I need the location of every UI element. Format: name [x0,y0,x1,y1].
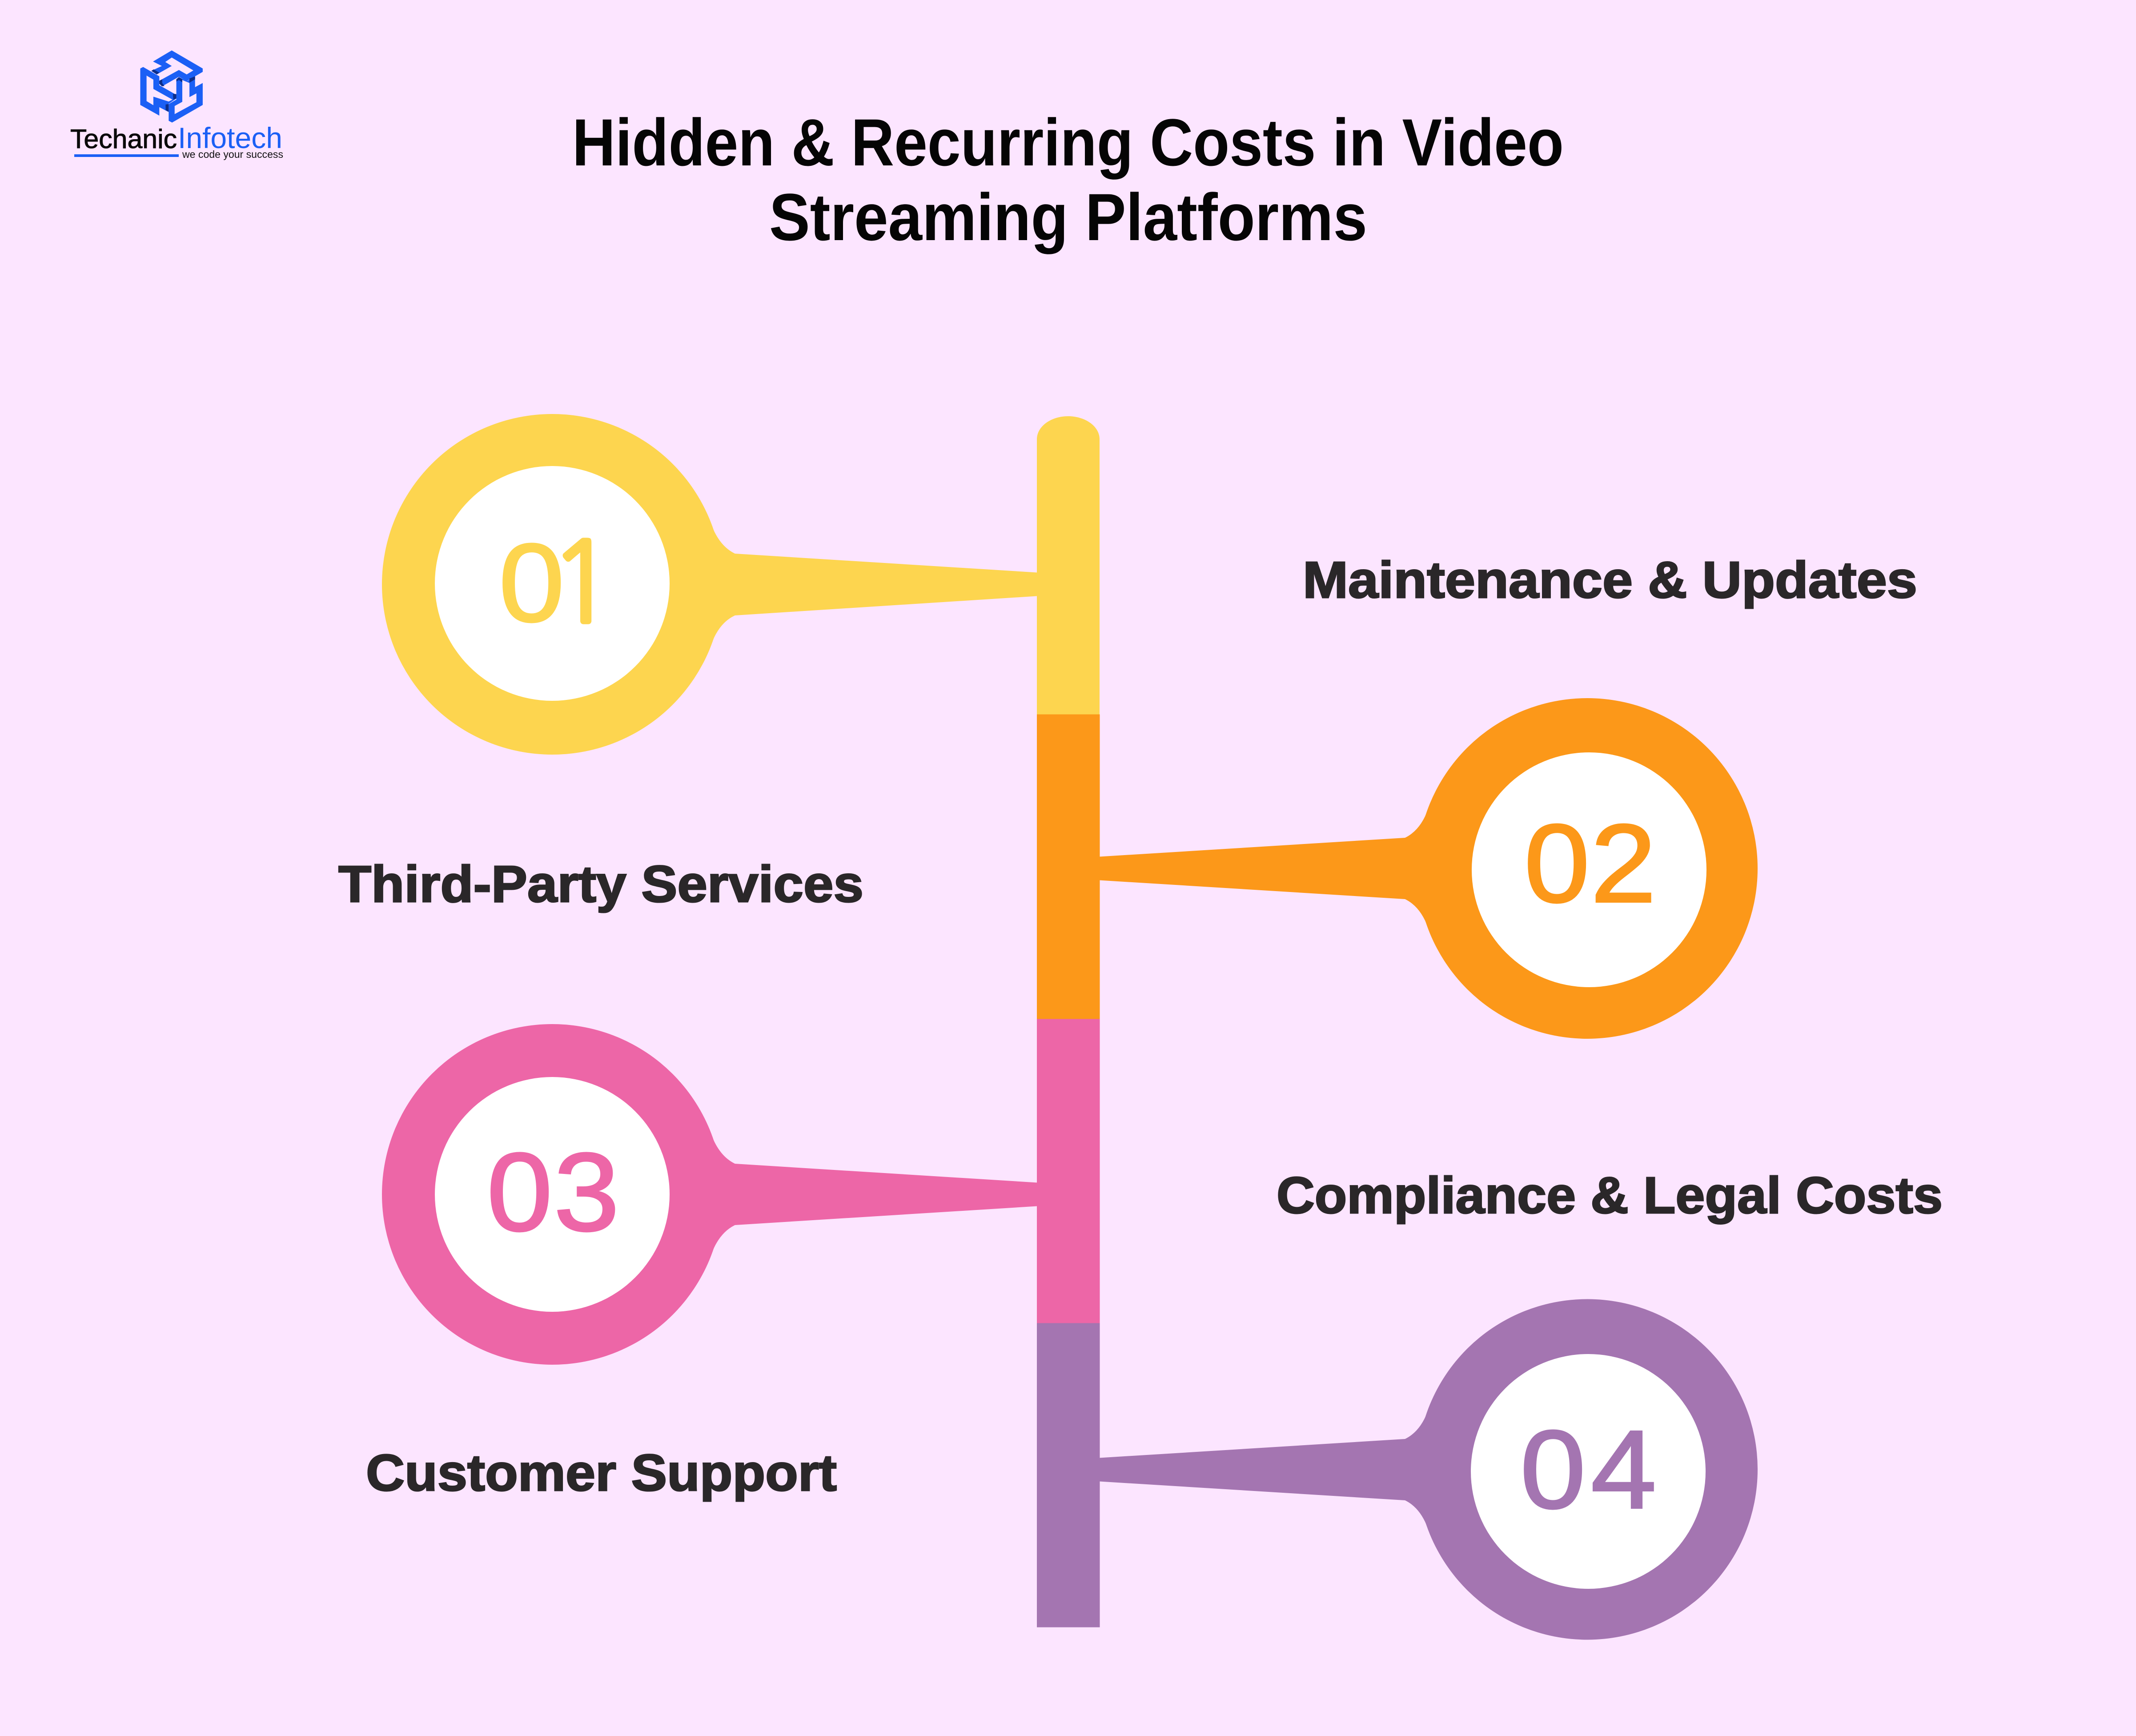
step 02 marker [1096,698,1758,1039]
logo underline [74,154,179,157]
step 03 marker [382,1024,1040,1365]
digit 0: 0 [499,521,564,645]
inner disc 01 [435,466,670,701]
connector neck 03 [707,1135,1040,1254]
outer ring 01 [382,414,723,755]
inner disc 02 [1472,752,1706,987]
inner disc 04 [1471,1354,1706,1589]
step 04 marker [1096,1299,1758,1640]
label: Third-Party Services: Third-Party Services [338,855,863,913]
central vertical bar [1037,416,1100,1628]
outer ring 03 [382,1024,723,1365]
number 02: 02 [1524,801,1656,925]
bar segment: purple [1037,1323,1100,1628]
step 01 marker [382,414,1040,755]
icon: isometric cube mark [140,50,203,123]
connector neck 04 [1096,1410,1433,1529]
logo tagline: we code your success [182,149,283,160]
logo wordmark: Infotech: Infotech [178,121,282,154]
bar segment: pink [1037,1019,1100,1323]
number 03: 03 [487,1130,619,1254]
connector neck 01 [707,525,1040,644]
inner disc 03 [435,1077,670,1312]
title line 2: Streaming Platforms [769,180,1367,254]
bar segment: orange [1037,714,1100,1019]
digit 1: 1 [549,527,616,638]
label: Compliance & Legal Costs: Compliance & Legal Costs [1277,1166,1943,1224]
title [572,105,1564,254]
connector neck 02 [1096,809,1433,928]
label: Customer Support: Customer Support [366,1444,837,1502]
title line 1: Hidden & Recurring Costs in Video [572,105,1564,180]
logo wordmark: Techanic: Techanic [70,124,177,154]
label: Maintenance & Updates: Maintenance & Updates [1303,551,1917,609]
bar segment: yellow [1037,416,1100,715]
number 04: 04 [1520,1407,1656,1531]
outer ring 04 [1417,1299,1758,1640]
number 01 [499,521,616,645]
logo: Techanic Infotech [70,50,283,160]
outer ring 02 [1417,698,1758,1039]
